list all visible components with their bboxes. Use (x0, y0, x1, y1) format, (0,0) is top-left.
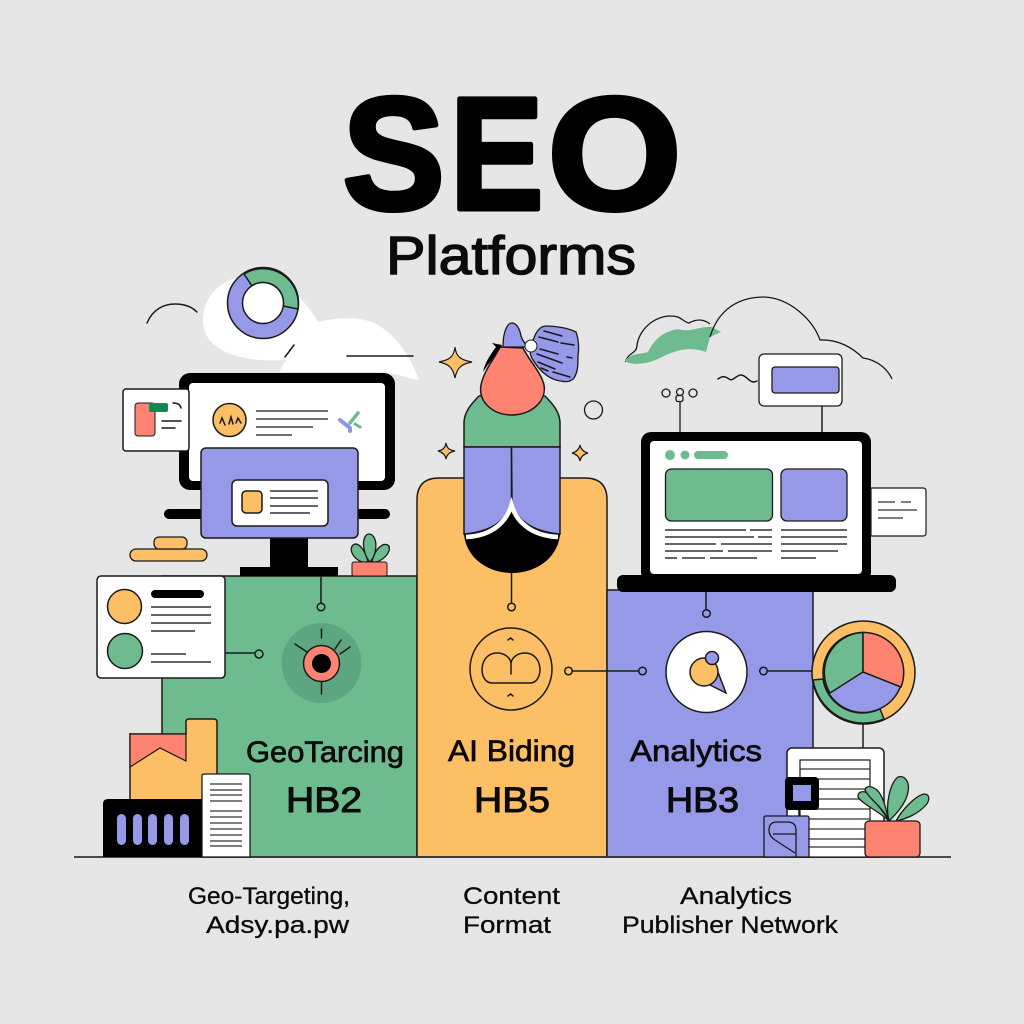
browser green block (666, 469, 772, 521)
character head tip (503, 323, 529, 347)
figure: capsule character (464, 323, 579, 573)
label: HB3: HB3 (666, 781, 739, 820)
caption: Analytics Publisher Network: Analytics (680, 883, 792, 910)
caption: Content Format (463, 883, 560, 939)
widget: small lavender display card (718, 354, 842, 432)
label: HB5: HB5 (474, 781, 550, 820)
caption: Geo-Targeting (188, 883, 350, 939)
decorative clouds right (625, 297, 892, 379)
label: Analytics: Analytics (630, 735, 762, 768)
browser dots (665, 450, 728, 460)
browser lavender block (781, 469, 847, 521)
icon: stacked yellow tablets (130, 537, 207, 561)
title: E (450, 64, 543, 243)
connector: lavender to pie (760, 667, 812, 675)
avatar and text lines (213, 404, 328, 436)
icon: eye target (282, 623, 362, 703)
black accent on drop (483, 343, 502, 372)
icon: desktop monitor (164, 373, 395, 576)
title (343, 64, 682, 244)
baseline (74, 856, 951, 858)
potted plant (858, 777, 929, 857)
document page (202, 774, 250, 857)
label: AI Biding: AI Biding (448, 735, 575, 768)
icon: donut chart top left (228, 268, 298, 338)
sprout mark (340, 413, 360, 431)
caption: Geo-Targeting: Adsy.pa.pw (206, 912, 350, 939)
small folder (764, 816, 809, 857)
server block (103, 799, 205, 857)
caption: Content Format: Content (463, 883, 560, 910)
speech note (525, 326, 579, 382)
sparkle: large (439, 347, 472, 378)
title: S (343, 65, 445, 244)
icon: circle outline symbol (470, 628, 552, 710)
label: GeoTarcing: GeoTarcing (246, 736, 404, 769)
lavender overlay card (201, 448, 358, 538)
coral drop (481, 347, 544, 415)
browser text lines (665, 530, 847, 558)
caption: Geo-Targeting: Geo-Targeting, (188, 883, 350, 910)
connector to eye icon (317, 576, 325, 611)
icon: pie chart with ring (812, 621, 915, 748)
capsule body (464, 396, 560, 573)
panel: lavender Analytics column (565, 590, 813, 857)
black square badge (785, 777, 819, 818)
subtitle: Platforms (386, 226, 636, 286)
icon: small plant left (351, 534, 389, 576)
sparkle: small right (572, 445, 588, 461)
title: O (548, 66, 682, 244)
caption: Analytics Publisher Network: Publisher Network (622, 912, 839, 939)
small ring (584, 401, 602, 419)
label: HB2: HB2 (286, 781, 362, 820)
decorative cloud: left white (147, 276, 419, 380)
card: small note right of laptop (871, 488, 926, 536)
connector to pin icon (703, 590, 710, 617)
connector: yellow to lavender (565, 667, 646, 675)
caption: Analytics Publisher Network (622, 883, 839, 939)
icon: factory and server group (103, 719, 250, 857)
sparkle: small left (438, 443, 455, 459)
icon: document stack with plant (764, 748, 929, 857)
card: profile list with connector (97, 576, 263, 678)
caption: Content Format: Format (463, 912, 551, 939)
connector from figure (508, 570, 515, 611)
icon: location pin in white circle (666, 632, 747, 712)
panel: green GeoTargeting column (162, 576, 417, 857)
icon: laptop (617, 432, 896, 592)
panel: yellow AI Biding column (417, 478, 607, 857)
card: small chart note left of monitor (123, 389, 189, 451)
icon: antenna with dots (662, 388, 697, 432)
